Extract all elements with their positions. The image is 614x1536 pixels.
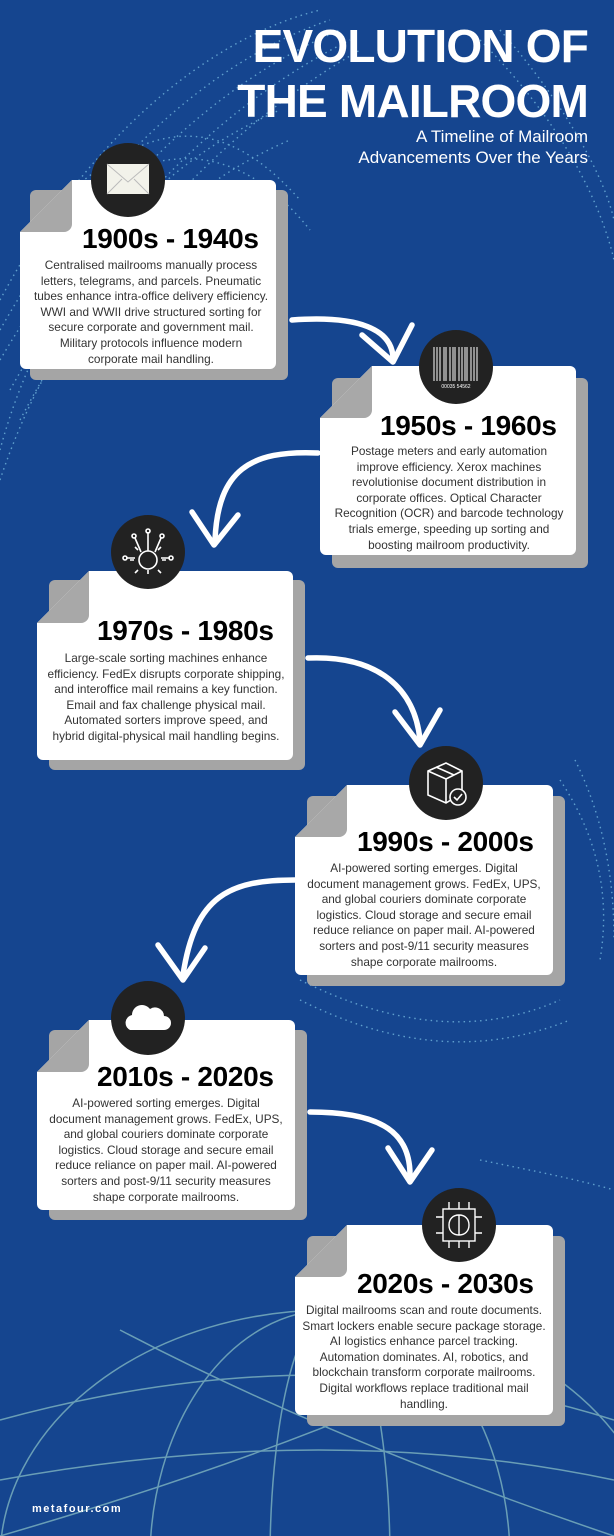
card: 1950s - 1960s: Postage meters and early automation [351,444,547,458]
card: 1990s - 2000s: shape corporate mailrooms. [351,955,497,969]
card: 1950s - 1960s: revolutionise document distribution in [352,475,546,489]
card: 2010s - 2020s: sorters and post-9/11 security measures [61,1174,271,1188]
card: 1990s - 2000s: 1990s - 2000s [357,826,534,857]
card: 2020s - 2030s: Smart lockers enable secure package storage. [302,1319,546,1333]
card: 1970s - 1980s: Automated sorters improve speed, and [64,713,268,727]
card: 2020s - 2030s: Digital mailrooms scan and route documents. [306,1303,542,1317]
subtitle: A Timeline of Mailroom [416,127,588,146]
icon: barcode [419,330,493,404]
card: 1900s - 1940s: secure corporate and government mail. [48,320,254,334]
card: 1900s - 1940s: Military protocols influence modern [60,336,242,350]
card: 1970s - 1980s: hybrid digital-physical mail handling begins. [53,729,279,743]
card: 2010s - 2020s: and global couriers dominate corporate [64,1127,268,1141]
title: EVOLUTION OF [253,20,588,72]
card: 1990s - 2000s [295,746,565,986]
card: 1990s - 2000s: document management grows. FedEx, UPS, [307,877,541,891]
card: 1900s - 1940s: WWI and WWII drive structured sorting for [41,305,261,319]
subtitle [358,127,588,167]
card: 1950s - 1960s: boosting mailroom productivity. [368,538,530,552]
card: 1950s - 1960s: improve efficiency. Xerox machines [357,460,541,474]
subtitle: Advancements Over the Years [358,148,588,167]
card: 1990s - 2000s: and global couriers dominate corporate [322,892,526,906]
title [237,20,588,127]
card: 2020s - 2030s [295,1188,565,1426]
card: 1970s - 1980s: Email and fax challenge physical mail. [66,698,266,712]
icon: box with check [409,746,483,820]
card: 2010s - 2020s: AI-powered sorting emerges. Digital [72,1096,260,1110]
icon: barcode: 00035 54562 [441,384,471,390]
card: 1950s - 1960s [320,330,588,568]
footer: website: metafour.com [32,1503,122,1515]
card: 1900s - 1940s [20,143,288,380]
card: 2020s - 2030s: AI logistics enhance parcel tracking. [330,1334,518,1348]
card: 1970s - 1980s: efficiency. FedEx disrupts corporate shipping, [48,667,284,681]
card: 1970s - 1980s: and interoffice mail remains a key function. [54,682,278,696]
card: 2020s - 2030s: handling. [400,1397,448,1411]
card: 1950s - 1960s: 1950s - 1960s [380,410,557,441]
icon: gear circuit [111,515,185,589]
card: 1900s - 1940s: corporate mail handling. [88,352,214,366]
card: 2010s - 2020s: 2010s - 2020s [97,1061,274,1092]
card: 1950s - 1960s: Recognition (OCR) and barcode technology [335,506,563,520]
icon: AI chip brain [422,1188,496,1262]
card: 2020s - 2030s: Digital workflows replace traditional mail [319,1381,529,1395]
card: 1900s - 1940s: 1900s - 1940s [82,223,259,254]
card: 2020s - 2030s: 2020s - 2030s [357,1268,534,1299]
card: 2010s - 2020s [37,981,307,1220]
icon: envelope [91,143,165,217]
card: 1970s - 1980s: 1970s - 1980s [97,615,274,646]
card: 1950s - 1960s: corporate offices. Optical Character [356,491,542,505]
title: THE MAILROOM [237,75,588,127]
card: 1990s - 2000s: logistics. Cloud storage and secure email [316,908,532,922]
card: 2020s - 2030s: Automation dominates. AI, robotics, and [320,1350,528,1364]
card: 1900s - 1940s: Centralised mailrooms manually process [45,258,257,272]
card: 1990s - 2000s: AI-powered sorting emerges. Digital [330,861,518,875]
card: 2010s - 2020s: logistics. Cloud storage and secure email [58,1143,274,1157]
card: 1970s - 1980s [37,515,305,770]
card: 2010s - 2020s: document management grows. FedEx, UPS, [49,1112,283,1126]
card: 2010s - 2020s: shape corporate mailrooms. [93,1190,239,1204]
card: 1990s - 2000s: reduce reliance on paper mail. AI-powered [313,923,535,937]
card: 1950s - 1960s: trials emerge, speeding up sorting and [349,522,549,536]
card: 1990s - 2000s: sorters and post-9/11 security measures [319,939,529,953]
card: 2020s - 2030s: blockchain transform corporate mailrooms. [313,1365,535,1379]
card: 1970s - 1980s: Large-scale sorting machines enhance [65,651,267,665]
card: 1900s - 1940s: tubes enhance intra-office delivery efficiency. [34,289,268,303]
icon: cloud [111,981,185,1055]
card: 1900s - 1940s: letters, telegrams, and parcels. Pneumatic [41,274,261,288]
card: 2010s - 2020s: reduce reliance on paper mail. AI-powered [55,1158,277,1172]
